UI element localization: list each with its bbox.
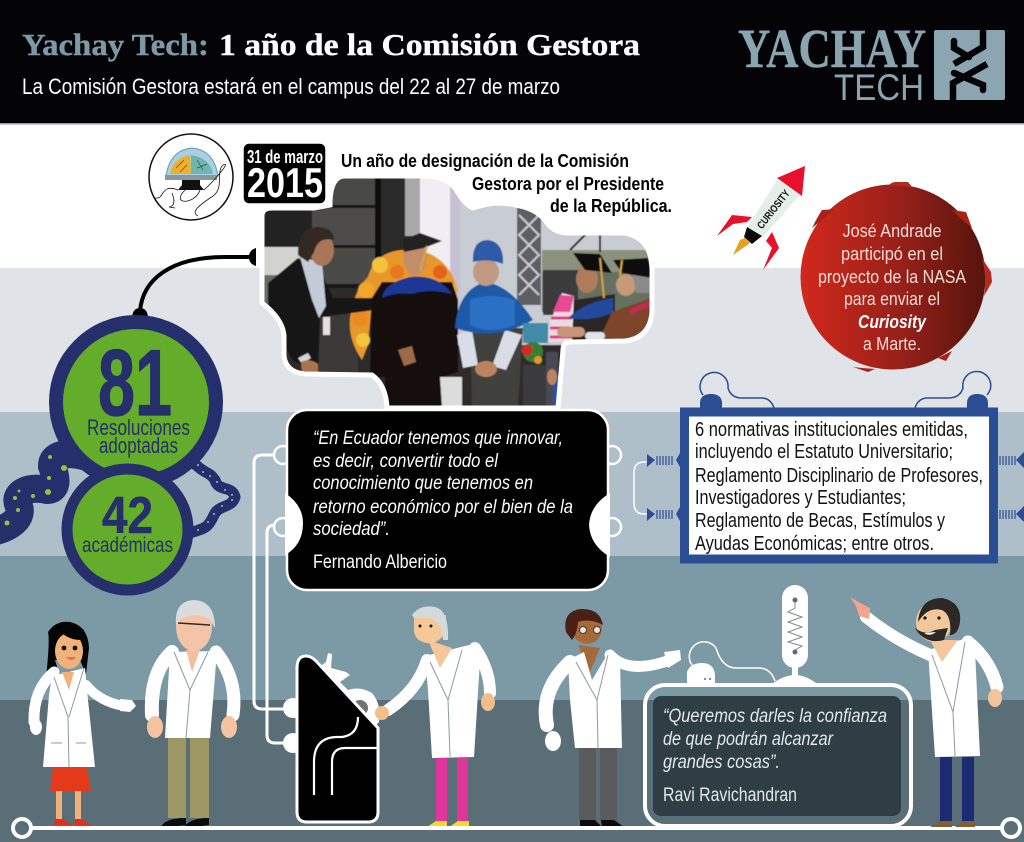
quote text: es decir, convertir todo el <box>313 450 499 472</box>
callout text: para enviar el <box>844 288 940 309</box>
logo: Yachay Tech: TECH <box>834 67 924 108</box>
stat: 42 académicas <box>62 464 194 596</box>
quote text <box>313 427 573 573</box>
machine <box>283 653 380 822</box>
person: man with khaki trousers <box>147 600 237 827</box>
quote text: Ravi Ravichandran <box>663 785 797 806</box>
stat: 81 resoluciones: 81 <box>98 330 172 435</box>
norms text: 6 normativas institucionales emitidas, <box>695 419 968 441</box>
title <box>22 27 641 62</box>
quote text: de que podrán alcanzar <box>663 729 834 750</box>
title: 1 año de la Comisión Gestora <box>219 27 641 62</box>
quote panel: Ravi Ravichandran <box>645 685 911 826</box>
lab device and lamp <box>687 585 816 683</box>
quote text: conocimiento que tenemos en <box>313 472 533 494</box>
quote panel: Fernando Albericio <box>274 410 621 590</box>
event description: Un año de designación de la Comisión <box>341 151 629 171</box>
quote text <box>663 706 887 806</box>
person: woman with red skirt <box>30 622 136 825</box>
event icon: brain in circle <box>149 134 233 220</box>
person: bearded man pointing <box>850 597 1002 827</box>
person: man with pink trousers <box>375 606 495 827</box>
side connectors of norms box <box>634 452 1024 522</box>
person: man with grey trousers <box>545 609 681 827</box>
date badge: 2015 <box>247 159 323 206</box>
callout text: a Marte. <box>863 333 921 354</box>
icon: Curiosity rocket: CURIOSITY <box>755 188 793 231</box>
norms text: incluyendo el Estatuto Universitario; <box>695 441 953 463</box>
subtitle: La Comisión Gestora estará en el campus del 22 al 27 de marzo <box>22 74 560 99</box>
stat: 81 resoluciones: adoptadas <box>99 433 178 458</box>
stat: 81 resoluciones: Resoluciones <box>87 415 190 440</box>
stat connectors: DNA strands <box>0 450 235 532</box>
title: Yachay Tech: <box>22 27 209 62</box>
callout: José Andrade <box>800 182 992 372</box>
connector line from photo to stat <box>132 248 256 317</box>
callout text: Curiosity <box>858 311 927 332</box>
quote text: retorno económico por el bien de la <box>313 496 573 518</box>
norms text: Investigadores y Estudiantes; <box>695 487 906 509</box>
panel: institutional norms <box>684 371 994 559</box>
quote text: sociedad”. <box>313 518 390 540</box>
norms text <box>695 419 983 555</box>
circuit baseline with end nodes <box>13 819 1020 837</box>
logo: Yachay Tech: YACHAY <box>738 18 926 79</box>
norms text: Ayudas Económicas; entre otros. <box>695 533 934 555</box>
quote text: “En Ecuador tenemos que innovar, <box>313 427 563 449</box>
callout text <box>818 220 967 354</box>
norms text: Reglamento de Becas, Estímulos y <box>695 510 945 532</box>
photo: ceremony <box>255 170 655 410</box>
circuit lines to machine <box>254 455 292 743</box>
stat: 42 académicas: 42 <box>102 487 153 545</box>
date badge: 31 de marzo <box>247 147 323 167</box>
quote text: Fernando Albericio <box>313 551 447 573</box>
callout text: participó en el <box>841 243 943 264</box>
stat: 42 académicas: académicas <box>82 534 173 557</box>
callout text: proyecto de la NASA <box>818 266 967 287</box>
icon: Curiosity rocket <box>717 166 805 270</box>
stat: 81 resoluciones <box>49 315 223 489</box>
callout text: José Andrade <box>842 220 942 241</box>
logo: Yachay Tech <box>738 18 1005 108</box>
event description <box>341 151 672 216</box>
event description: de la República. <box>550 196 672 216</box>
header band <box>0 0 1024 124</box>
event description: Gestora por el Presidente <box>472 174 664 194</box>
quote text: “Queremos darles la confianza <box>663 706 887 727</box>
date badge <box>243 143 326 206</box>
quote text: grandes cosas”. <box>663 752 780 773</box>
